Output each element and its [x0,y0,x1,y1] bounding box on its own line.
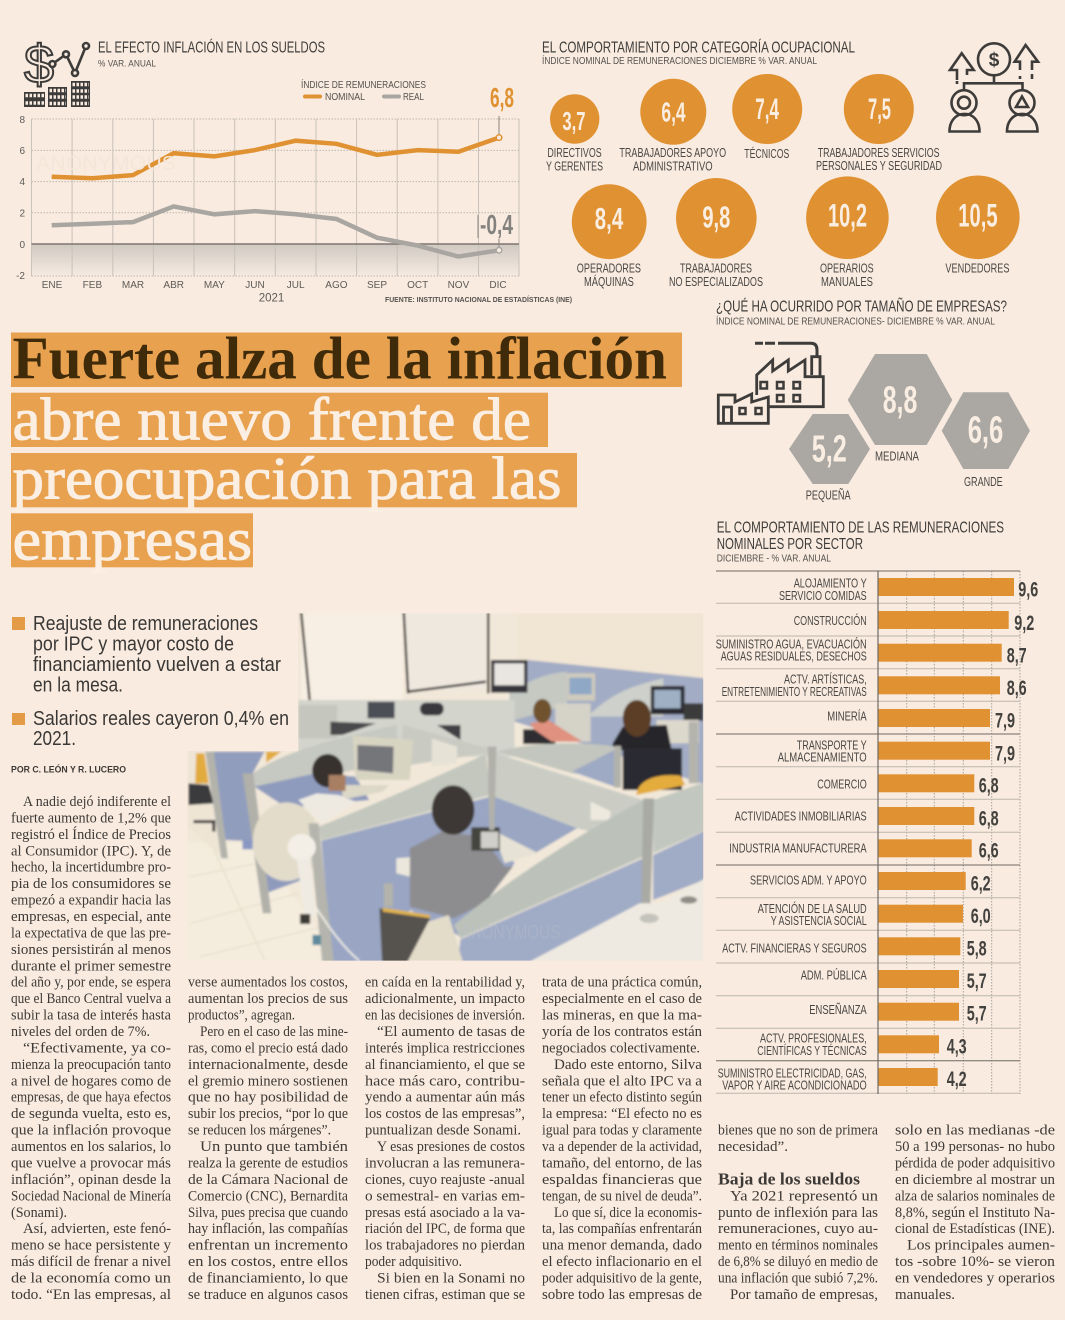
article column 1: que la inflación provoque [11,1123,171,1139]
line chart: nominal and real wages: JUL [287,280,305,291]
title: Fuerte alza de la inflación [12,326,667,392]
item: apoyo administrativo [619,79,726,173]
article column 1: al Consumidor (IPC). Y, de [11,843,171,859]
line chart: nominal and real wages: 4 [19,177,25,188]
article column 6: 8,8%, según el Instituto Na- [895,1205,1055,1221]
bar labels: INDUSTRIA MANUFACTURERA [729,841,867,855]
bar values: 9,2 [1014,612,1034,635]
article column 1: registró el Índice de Precios [11,826,171,843]
item: directivos: 3,7 [562,106,586,136]
item: operadores: 8,4 [595,201,624,236]
article column 3: riación del IPC, de forma que [365,1221,525,1237]
legend: REAL [403,91,424,103]
line chart: nominal and real wages: 2 [19,208,25,220]
icon: factory [718,343,823,423]
item: directivos [546,94,603,173]
article column 2: realza la gerente de estudios [188,1156,348,1172]
article column 1: aumentos en los salarios, lo [11,1139,171,1155]
heading: efecto inflación: % VAR. ANUAL [98,58,156,70]
deck: bullet points: en la mesa. [33,674,123,697]
item: operadores: MÁQUINAS [584,274,634,289]
article column 1: meno se hace persistente y [11,1238,172,1254]
bar labels: CIENTÍFICAS Y TÉCNICAS [757,1043,867,1058]
article column 3: puntualizan desde Sonami. [365,1123,521,1139]
item: operarios: OPERARIOS [820,262,874,276]
item: servicios personales [816,74,942,173]
article column 2: Silva, pues precisa que cuando [188,1205,348,1221]
article column 2: se traduce en algunos casos [188,1287,348,1303]
article column 4: tengan, de su nivel de deuda”. [542,1188,702,1204]
article column 4: negociados colectivamente. [542,1040,700,1056]
article column 4: tener un efecto distinto según [542,1090,703,1106]
deck: bullet points: Reajuste de remuneraciones [33,612,258,635]
bar values: 5,7 [967,1003,987,1026]
circles: occupational categories [546,74,1020,289]
item: directivos: Y GERENTES [546,159,603,173]
heading: remuneraciones por sector: DICIEMBRE - % VAR. ANUAL [717,553,831,565]
line chart: nominal and real wages: AGO [325,280,348,291]
article column 4: igual para todas y claramente [542,1123,702,1139]
bar labels: CONSTRUCCIÓN [794,613,867,628]
article column 1: Así, advierten, este fenó- [23,1221,171,1237]
hexagon: grande: GRANDE [964,475,1003,489]
article column 2: de la Cámara Nacional de [188,1172,348,1188]
article column 1: más difícil de frenar a nivel [11,1254,171,1270]
article column 2: se reducen los márgenes”. [188,1123,331,1139]
bar values: 5,7 [967,970,987,993]
article column 3: interés implica restricciones [365,1040,525,1056]
bar values: 8,7 [1007,644,1027,667]
title [11,326,682,572]
title: empresas [12,506,252,572]
item: no especializados: TRABAJADORES [680,262,752,276]
article column 5: necesidad”. [718,1139,788,1155]
article column 2: internacionalmente, desde [188,1057,348,1073]
hexagon: pequeña: 5,2 [812,429,847,471]
line chart: nominal and real wages: ABR [163,280,184,291]
article column 5: remuneraciones, cuyo au- [718,1221,878,1237]
source note: FUENTE: INSTITUTO NACIONAL DE ESTADÍSTICAS (INE) [385,295,572,304]
article column 2: productos”, agregan. [188,1008,295,1024]
item: no especializados: 9,8 [702,199,730,234]
bar values: 4,3 [947,1035,967,1058]
deck: bullet points: por IPC y mayor costo de [33,633,234,656]
bar labels: ADM. PÚBLICA [801,967,867,982]
item: técnicos [732,74,802,161]
bar values: 6,2 [971,872,991,895]
item: servicios personales: PERSONALES Y SEGURIDAD [816,159,942,173]
item: apoyo administrativo: TRABAJADORES APOYO [619,146,726,160]
item: no especializados [669,178,763,289]
article column 1: Sociedad Nacional de Minería [11,1188,172,1204]
article column 1: que el Banco Central vuelva a [11,991,172,1007]
line chart: nominal and real wages: DIC [489,280,507,291]
bar labels [716,577,867,1092]
article column 4: poder adquisitivo de la gente, [542,1270,702,1286]
article column 6: Los principales aumen- [907,1238,1055,1254]
legend: NOMINAL [325,91,365,103]
article column 3: o semestral- en varias em- [365,1188,525,1204]
article column 4: trata de una práctica común, [542,975,702,991]
article column 1: inflación”, opinan desde la [11,1172,172,1188]
article column 5: mento en términos nominales [718,1238,878,1254]
icon: people and money: $ [989,50,1000,71]
article column 2: aumentan los precios de sus [188,991,348,1007]
line chart: nominal and real wages: 2021 [259,292,284,304]
title: abre nuevo frente de [12,386,531,452]
item: apoyo administrativo: ADMINISTRATIVO [633,159,713,173]
icon: dollar and chart: $ [24,35,54,95]
heading: efecto inflación [98,38,325,70]
article column 5: de 6,8% se diluyó en medio de [718,1254,878,1270]
hexagon: pequeña: PEQUEÑA [806,488,851,502]
hexagon: grande [942,392,1030,489]
article column 5: Por tamaño de empresas, [730,1287,878,1303]
bar labels: MINERÍA [827,709,867,724]
bar labels: SERVICIO COMIDAS [779,589,867,603]
article column 4: Lo que sí, dice la economis- [554,1205,702,1221]
bar values: 6,6 [979,840,999,863]
heading: categoría ocupacional: ÍNDICE NOMINAL DE REMUNERACIONES DICIEMBRE % VAR. ANUAL [542,54,817,67]
article column 6 [895,1123,1056,1303]
article column 1: siones persistirán al menos [11,942,171,958]
bar values: 8,6 [1007,677,1027,700]
hexagon: mediana: 8,8 [883,379,917,421]
heading: efecto inflación: EL EFECTO INFLACIÓN EN LOS SUELDOS [98,38,325,56]
heading: tamaño de empresas [716,296,1007,327]
article column 4: señala que el alto IPC va a [542,1073,703,1089]
series: real [52,206,499,256]
article column 2: que no hay posibilidad de [188,1090,348,1106]
article column 1: mienza la preocupación tanto [11,1057,171,1073]
article column 1: que vuelve a provocar más [11,1156,171,1172]
item: operarios: 10,2 [828,198,867,234]
hexagon: grande: 6,6 [968,410,1003,452]
article column 6: en diciembre al mostrar un [895,1172,1056,1188]
line chart: nominal and real wages: ANONYMOUS [36,153,176,175]
byline: POR C. LEÓN Y R. LUCERO [11,764,126,775]
article column 1: durante el primer semestre [11,958,171,974]
item: operarios [806,176,889,289]
article column 2: Un punto que también [200,1139,349,1155]
article column 1: a nivel de hogares como de [11,1073,171,1089]
bar values: 6,0 [971,905,991,928]
item: no especializados: NO ESPECIALIZADOS [669,275,763,289]
line chart: nominal and real wages: 8 [19,115,25,126]
bar labels: ALMACENAMIENTO [778,750,867,764]
item: vendedores: 10,5 [958,198,998,234]
bar labels: TRANSPORTE Y [797,738,867,752]
article column 6: tos -sobre 10%- se vieron [895,1254,1056,1270]
deck: bullet points [12,612,289,750]
line chart: nominal and real wages: 6 [19,146,25,157]
article column 4: yoría de los contratos están [542,1024,703,1040]
line chart: nominal and real wages: MAY [204,280,225,291]
icon: people and money [950,43,1038,131]
article column 6: en vendedores y operarios [895,1270,1055,1286]
line chart: nominal and real wages: 6,8 [490,82,514,113]
line chart: nominal and real wages: FEB [83,280,102,291]
bar values: 6,8 [979,807,999,830]
line chart: nominal and real wages: NOV [448,280,470,291]
bar values [947,579,1038,1091]
bar chart: sectors [716,571,1038,1094]
bar labels: ACTV. FINANCIERAS Y SEGUROS [722,941,867,955]
line chart: nominal and real wages: SEP [367,280,387,291]
article column 3: Y esas presiones de costos [377,1139,525,1155]
article column 2: hay inflación, las compañías [188,1221,348,1237]
bar labels: ENTRETENIMIENTO Y RECREATIVAS [722,685,867,699]
hexagon: pequeña [789,414,870,502]
article column 2: verse aumentados los costos, [188,975,348,991]
article column 3: hace más caro, contribu- [365,1073,525,1089]
article column 3: adicionalmente, un impacto [365,991,525,1007]
bar labels: Y ASISTENCIA SOCIAL [771,914,867,928]
item: apoyo administrativo: 6,4 [661,97,686,128]
article column 1: pia de los consumidores se [11,876,171,892]
article column 2 [188,975,349,1303]
bar labels: ACTV. ARTÍSTICAS, [784,671,867,686]
article column 3: poder adquisitivo. [365,1254,462,1270]
article column 5: punto de inflexión para las [718,1205,878,1221]
line chart: nominal and real wages [16,82,519,304]
article column 5: una inflación que subió 7,2%. [718,1270,878,1286]
article column 3: ciones, cuyo reajuste -anual [365,1172,525,1188]
bar values: 7,9 [995,710,1015,733]
bar labels: VAPOR Y AIRE ACONDICIONADO [722,1078,867,1092]
article column 3: “El aumento de tasas de [377,1024,525,1040]
bar labels: ACTIVIDADES INMOBILIARIAS [735,810,867,824]
heading: remuneraciones por sector [717,519,1004,565]
photo: office workers in cubicles [188,613,704,961]
photo: office workers in cubicles: ANONYMOUS [461,921,560,943]
article column 1: hecho, la incertidumbre pro- [11,860,171,876]
legend [301,78,426,103]
legend: ÍNDICE DE REMUNERACIONES [301,78,426,91]
bar labels: SERVICIOS ADM. Y APOYO [750,873,867,887]
article column 4: espaldas financieras que [542,1172,702,1188]
bar labels: ENSEÑANZA [809,1003,867,1017]
icon: dollar and chart [24,35,90,107]
bar labels: SUMINISTRO AGUA, EVACUACIÓN [716,637,867,652]
article column 3 [365,975,526,1303]
article column 1: de segunda vuelta, esto es, [11,1106,171,1122]
article column 1: empresas, de que haya efectos [11,1090,171,1106]
line chart: nominal and real wages: JUN [245,280,265,291]
article column 5: bienes que no son de primera [718,1123,879,1139]
line chart: nominal and real wages: MAR [122,280,144,291]
heading: tamaño de empresas: ÍNDICE NOMINAL DE REMUNERACIONES- DICIEMBRE % VAR. ANUAL [716,314,995,327]
item: vendedores [936,176,1020,276]
bar values: 9,6 [1018,579,1038,602]
item: operarios: MANUALES [821,275,873,289]
line chart: nominal and real wages: ENE [42,280,63,291]
article column 1: “Efectivamente, ya co- [23,1040,171,1056]
article column 6: manuales. [895,1287,955,1303]
article column 1: (Sonami). [11,1205,67,1221]
item: servicios personales: TRABAJADORES SERVICIOS [818,146,940,160]
article column 1: de la economía como un [11,1270,172,1286]
article column 1: empezó a expandir hacia las [11,893,171,909]
bar values: 5,8 [967,937,987,960]
bar labels: SUMINISTRO ELECTRICIDAD, GAS, [718,1066,867,1080]
article column 1: subir la tasa de interés hasta [11,1008,172,1024]
article column 3: yendo a aumentar aún más [365,1090,525,1106]
article column 3: los trabajadores no pierdan [365,1238,526,1254]
article column 4: Dado este entorno, Silva [554,1057,703,1073]
article column 1 [11,794,172,1303]
bar values: 4,2 [947,1068,967,1091]
article column 4: sobre todo las empresas de [542,1287,702,1303]
article column 2: enfrentan un incremento [188,1238,348,1254]
article column 3: Si bien en la Sonami no [377,1270,525,1286]
heading: categoría ocupacional: EL COMPORTAMIENTO POR CATEGORÍA OCUPACIONAL [542,38,855,56]
article column 6: solo en las medianas -de [895,1123,1055,1139]
bar labels: COMERCIO [817,777,867,791]
article column 1: niveles del orden de 7%. [11,1024,150,1040]
article column 1: todo. “En las empresas, al [11,1287,171,1303]
heading: remuneraciones por sector: NOMINALES POR SECTOR [717,536,863,553]
item: técnicos: TÉCNICOS [744,146,789,161]
article column 1: empresas, en especial, ante [11,909,171,925]
deck: bullet points: financiamiento vuelven a estar [33,653,281,676]
article column 2: Comercio (CNC), Bernardita [188,1188,349,1204]
article column 6: alza de salarios nominales de [895,1188,1055,1204]
article column 4 [542,975,703,1303]
bar labels: ALOJAMIENTO Y [794,577,867,591]
article column 3: en las decisiones de inversión. [365,1008,525,1024]
article column 4: va a depender de la actividad, [542,1139,702,1155]
bar values: 7,9 [995,742,1015,765]
article column 2: Pero en el caso de las mine- [200,1024,348,1040]
article column 2: ras, como el precio está dado [188,1040,348,1056]
article column 5 [718,1123,879,1303]
line chart: nominal and real wages: OCT [407,280,428,291]
bar labels: AGUAS RESIDUALES, DESECHOS [721,650,867,664]
item: vendedores: VENDEDORES [945,262,1010,276]
hexagon: mediana: MEDIANA [875,450,920,464]
article column 2: en los costos, entre ellos [188,1254,348,1270]
line chart: nominal and real wages: -2 [16,271,25,282]
subheading: Baja de los sueldos [718,1170,860,1188]
deck panel mask [180,605,298,751]
article column 6: 50 a 199 personas- no hubo [895,1139,1055,1155]
article column 3: al financiamiento, el que se [365,1057,525,1073]
item: operadores: OPERADORES [577,262,641,276]
bar values: 6,8 [979,775,999,798]
line chart: nominal and real wages: 0 [19,240,25,251]
article column 3: involucran a las remunera- [365,1156,525,1172]
deck: bullet points: 2021. [33,727,76,750]
article column 3: presas está asociado a la va- [365,1205,525,1221]
article column 6: cional de Estadísticas (INE). [895,1221,1055,1237]
item: operadores [572,184,647,289]
item: servicios personales: 7,5 [868,93,891,126]
article column 4: el efecto inflacionario en el [542,1254,702,1270]
article column 2: el gremio minero sostienen [188,1073,349,1089]
hexagon: mediana [848,354,952,464]
item: técnicos: 7,4 [755,93,779,126]
article column 2: subir los precios, “por lo que [188,1106,348,1122]
line chart: nominal and real wages: -0,4 [480,209,513,240]
article column 5: Ya 2021 representó un [730,1188,879,1204]
item: directivos: DIRECTIVOS [547,146,602,160]
article column 4: ta, las compañías enfrentarán [542,1221,703,1237]
article column 1: la expectativa de que las pre- [11,925,171,941]
article column 4: tamaño, del entorno, de las [542,1156,702,1172]
bar labels: ACTV. PROFESIONALES, [760,1032,867,1046]
article column 1: A nadie dejó indiferente el [23,794,171,810]
article column 1: fuerte aumento de 1,2% que [11,810,171,826]
title: preocupación para las [12,446,562,512]
article column 3: tienen cifras, estiman que se [365,1287,525,1303]
article column 3: en caída en la rentabilidad y, [365,975,525,991]
article column 2: de financiamiento, lo que [188,1270,348,1286]
article column 4: la empresa: “El efecto no es [542,1106,702,1122]
article column 3: los costos de las empresas”, [365,1106,525,1122]
series: nominal [52,138,499,178]
article column 4: especialmente en el caso de [542,991,702,1007]
article column 1: del año y, por ende, se espera [11,975,172,991]
deck: bullet points: Salarios reales cayeron 0,4% en [33,707,289,730]
heading: categoría ocupacional [542,38,855,67]
bar labels: ATENCIÓN DE LA SALUD [758,901,867,916]
bars [878,578,1014,1086]
article column 6: pérdida de poder adquisitivo [895,1156,1055,1172]
article column 4: las mineras, en que la ma- [542,1008,702,1024]
article column 4: una menor demanda, dado [542,1238,702,1254]
